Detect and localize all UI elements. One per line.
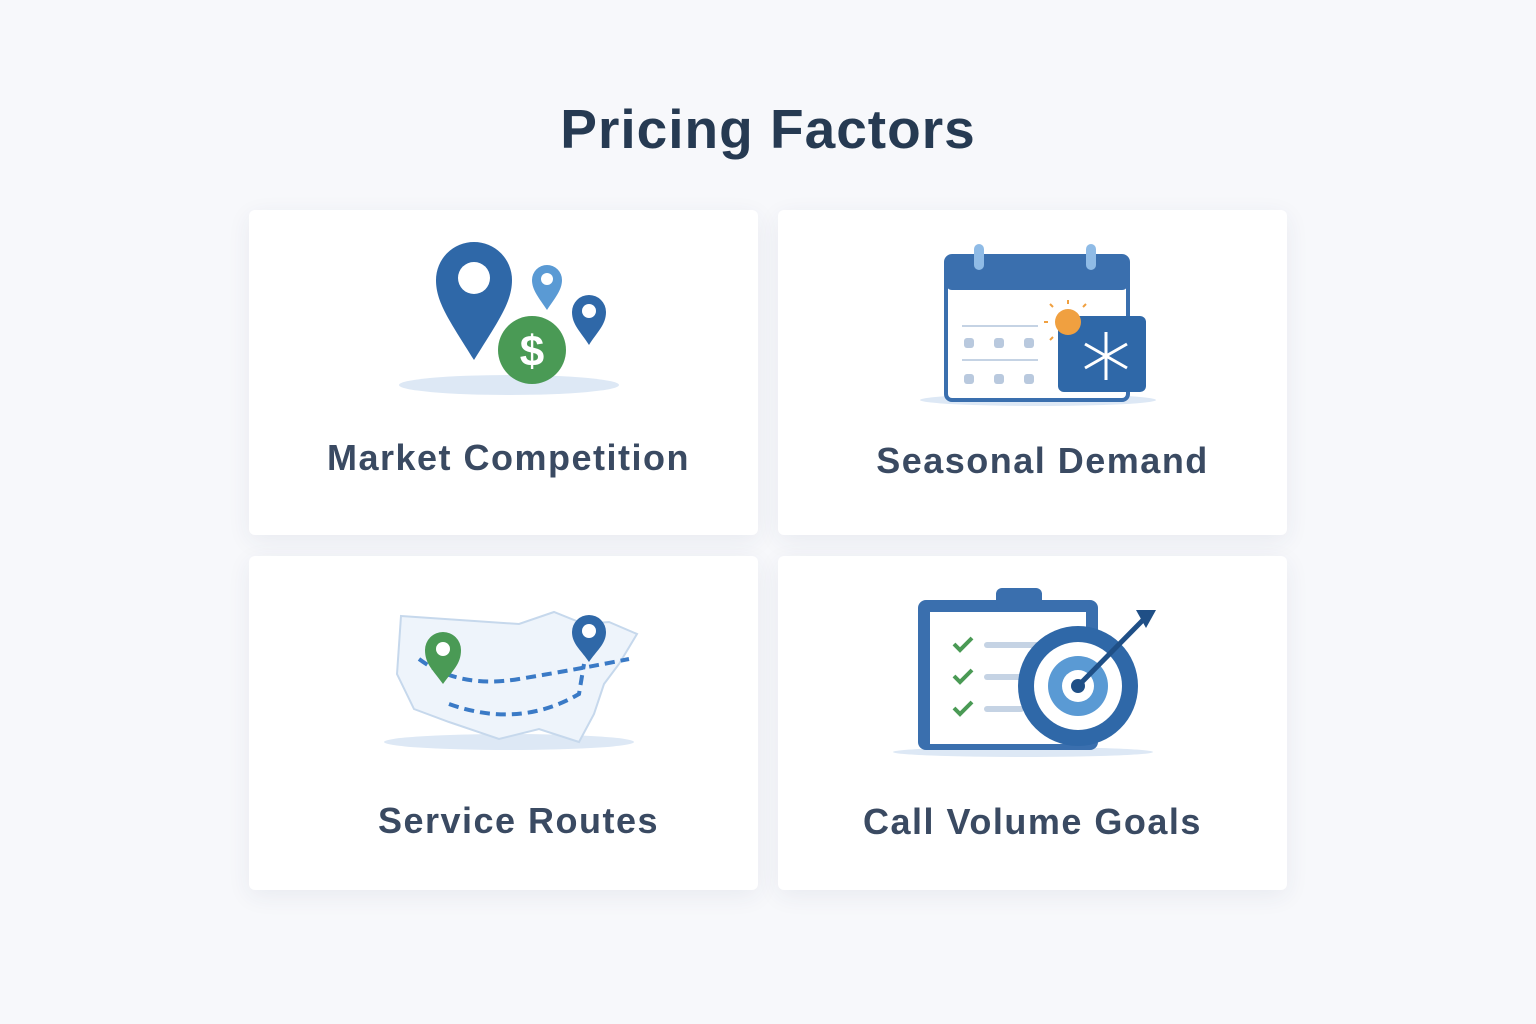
- title: Pricing Factors: [560, 98, 976, 160]
- icon: clipboard with target: [893, 588, 1156, 757]
- panel: market competition: [249, 210, 758, 535]
- panel: seasonal demand: [778, 210, 1287, 535]
- icon: calendar with sun and snowflake: [920, 244, 1156, 406]
- panel: service routes: [249, 556, 758, 890]
- label: Seasonal Demand: [876, 440, 1209, 481]
- label: Market Competition: [327, 437, 690, 478]
- icon: map pins with dollar: $: [520, 327, 544, 376]
- icon: map with route: [384, 611, 638, 750]
- icon: map pins with dollar: [399, 242, 619, 395]
- label: Service Routes: [378, 800, 659, 841]
- label: Call Volume Goals: [863, 801, 1202, 842]
- panel: call volume goals: [778, 556, 1287, 890]
